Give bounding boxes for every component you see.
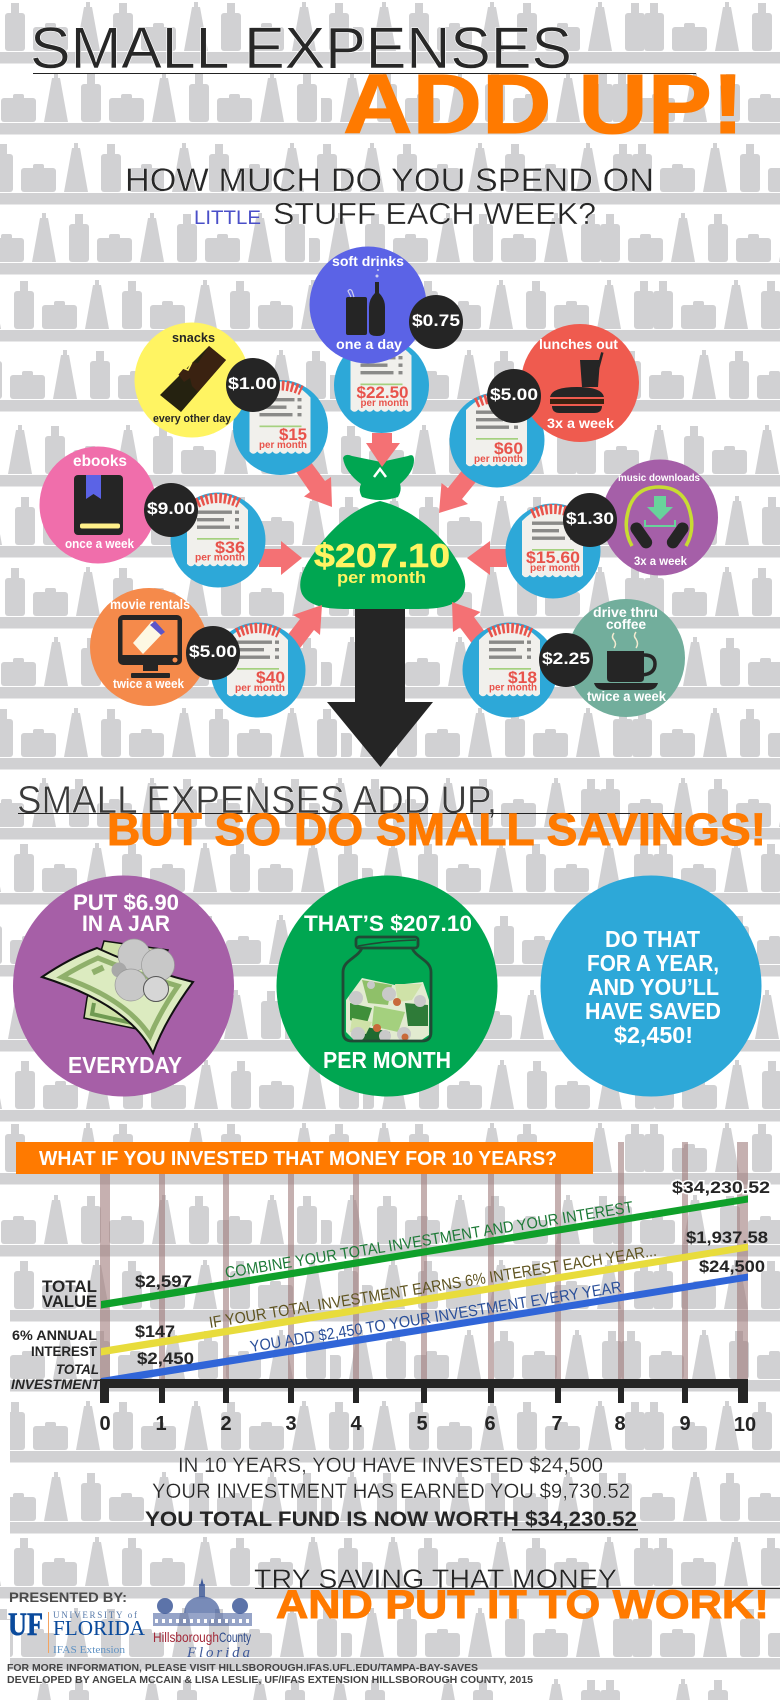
chart: end values: $34,230.52 [672,1179,770,1197]
chart: year labels: 10 [734,1414,756,1436]
receipt: soft drinks $22.50: $22.50 [356,383,408,402]
logo: University of Florida [8,1607,146,1656]
chart: left axis labels: INVESTMENT [11,1377,102,1392]
footer credits: FOR MORE INFORMATION, PLEASE VISIT HILLSBOROUGH.IFAS.UFL.EDU/TAMPA-BAY-SAVES [7,1662,478,1674]
subtitle question: HOW MUCH DO YOU SPEND ON [125,162,654,198]
panel: that's $207.10 per month [276,876,498,1096]
chart: start values [135,1273,194,1368]
chart: start values: $2,450 [137,1350,194,1368]
item: drive thru coffee: drive thru [593,604,658,620]
panel: do that for a year: AND YOU’LL [588,974,719,1000]
item: snacks [134,322,250,438]
summary text [145,1454,638,1531]
heading: small savings [17,779,766,855]
price: $9.00 [144,483,198,537]
closing heading [254,1564,780,1627]
title: small expenses add up: ADD UP! [343,57,744,151]
item: snacks: every other day [153,413,232,425]
big down arrow [327,609,433,767]
chart: start values: $147 [135,1323,175,1341]
item: snacks: snacks [172,330,215,345]
receipt: coffee $18: $18 [508,668,537,687]
panel: put $6.90 in a jar: IN A JAR [82,911,170,936]
summary text: IN 10 YEARS, YOU HAVE INVESTED $24,500 [178,1454,603,1477]
money bag total [300,455,465,609]
item: music downloads: 3x a week [634,554,687,568]
receipt: ebooks $36 [170,492,266,588]
chart: end values: $1,937.58 [686,1229,768,1247]
receipt: music $15.60: $15.60 [526,548,580,567]
receipt: ebooks $36: $36 [215,538,245,557]
receipt: soft drinks $22.50 [334,338,429,433]
chart: left axis labels: VALUE [42,1292,97,1311]
item: lunches out [521,324,639,442]
receipt: music $15.60: per month [530,563,580,574]
receipt: music $15.60 [506,504,600,598]
chart: year labels: 6 [484,1413,496,1435]
logo: Hillsborough County: Hillsborough [153,1629,219,1645]
subtitle question: LITTLE [194,208,261,229]
item: soft drinks: one a day [336,336,402,352]
receipt: coffee $18 [462,622,558,718]
chart: title banner: WHAT IF YOU INVESTED THAT MONEY FOR 10 YEARS? [39,1148,557,1170]
chart: year labels: 3 [285,1413,297,1435]
chart: end values [672,1179,770,1276]
chart: total value line [101,1196,748,1308]
summary text: YOUR INVESTMENT HAS EARNED YOU $9,730.52 [152,1480,630,1503]
price: $2.25 [539,633,593,687]
price: $0.75 [409,295,463,349]
price: $0.75: $0.75 [412,311,460,330]
item: movie rentals [90,588,208,706]
title: small expenses add up: SMALL EXPENSES [30,16,572,81]
chart: line captions: IF YOUR TOTAL INVESTMENT EARNS 6% INTEREST EACH YEAR... [208,1243,658,1332]
chart: year labels [99,1413,756,1436]
icon: bills and coins [42,939,193,1053]
panel: do that for a year: FOR A YEAR, [587,950,719,976]
item: lunches out: lunches out [539,336,618,352]
chart: left axis labels [11,1277,102,1392]
presented by: PRESENTED BY: [9,1589,127,1605]
panel: that's $207.10 per month: PER MONTH [323,1047,451,1073]
receipt: snacks $15: per month [259,440,307,451]
chart: year labels: 2 [220,1413,232,1435]
chart: investment line [101,1274,748,1386]
price: $9.00: $9.00 [147,499,195,518]
logo: University of Florida: FLORIDA [53,1616,146,1640]
item: ebooks [40,446,156,564]
price: $5.00 movies: $5.00 [189,642,237,661]
item: ebooks: ebooks [73,453,127,470]
chart: year labels: 9 [679,1413,691,1435]
chart: line captions: YOU ADD $2,450 TO YOUR INVESTMENT EVERY YEAR [249,1279,623,1356]
receipt: lunches $60: $60 [494,439,523,458]
closing heading: TRY SAVING THAT MONEY [254,1564,617,1594]
chart: year labels: 5 [416,1413,428,1435]
chart: year labels: 8 [614,1413,626,1435]
panel: put $6.90 in a jar: EVERYDAY [68,1052,182,1078]
subtitle question: STUFF EACH WEEK? [273,196,596,231]
closing heading: AND PUT IT TO WORK! [276,1583,769,1627]
item: drive thru coffee: coffee [606,616,646,632]
receipt: lunches $60: per month [474,454,523,465]
item: movie rentals: movie rentals [110,597,190,612]
item: movie rentals: twice a week [113,676,185,691]
chart: interest line [101,1244,748,1356]
salmon arrows into bag [259,433,507,665]
logo: Hillsborough County: County [219,1629,251,1645]
item: soft drinks: soft drinks [332,253,404,269]
panel: put $6.90 in a jar [13,876,234,1096]
chart: left axis labels: TOTAL [56,1362,99,1377]
item: music downloads: music downloads [618,472,700,484]
chart: line captions [208,1199,658,1356]
money bag total: per month [337,568,426,587]
chart: title banner [16,1142,593,1174]
receipt: movies $40: per month [235,683,285,694]
receipt: lunches $60 [450,392,544,488]
chart: year labels: 0 [99,1413,111,1435]
logo: Hillsborough County: Florida [186,1645,250,1661]
title: small expenses add up [30,16,744,151]
receipt: soft drinks $22.50: per month [360,398,408,409]
footer credits [7,1662,533,1686]
price: $1.00: $1.00 [228,374,277,393]
chart: x axis [100,1379,748,1403]
panel: do that for a year: HAVE SAVED [585,998,721,1024]
receipt: coffee $18: per month [489,682,537,694]
subtitle question [125,162,654,231]
receipt: snacks $15 [233,380,328,475]
panel: do that for a year [540,876,762,1096]
heading: small savings: SMALL EXPENSES ADD UP, [17,779,497,822]
chart: ten year investment [11,1142,770,1436]
logo: University of Florida: UF [8,1607,43,1643]
footer credits: DEVELOPED BY ANGELA MCCAIN & LISA LESLIE, UF/IFAS EXTENSION HILLSBOROUGH COUNTY, 2015 [7,1674,533,1686]
item: music downloads [602,460,718,576]
chart: line captions: COMBINE YOUR TOTAL INVESTMENT AND YOUR INTEREST [224,1199,635,1282]
icon: jar of money [343,937,431,1042]
chart: left axis labels: TOTAL [42,1277,97,1296]
panel: put $6.90 in a jar: PUT $6.90 [73,890,179,915]
logo: University of Florida: IFAS Extension [53,1644,126,1656]
receipt: movies $40: $40 [256,668,285,687]
panel: that's $207.10 per month: THAT’S $207.10 [304,911,472,936]
chart: left axis labels: 6% ANNUAL [12,1328,97,1343]
item: lunches out: 3x a week [547,415,614,431]
chart: year labels: 1 [155,1413,167,1435]
logo: Hillsborough County [153,1578,252,1661]
chart: year labels: 7 [551,1413,563,1435]
price: $5.00 lunches [487,369,541,423]
heading: small savings: BUT SO DO SMALL SAVINGS! [107,804,766,855]
item: drive thru coffee: twice a week [587,688,666,704]
logo: University of Florida: UNIVERSITY of [53,1610,137,1620]
chart: year labels: 4 [350,1413,362,1435]
panel: do that for a year: $2,450! [614,1022,693,1048]
chart: end values: $24,500 [699,1258,765,1276]
chart: vertical year bars [100,1142,748,1380]
summary text: YOU TOTAL FUND IS NOW WORTH $34,230.52 [145,1508,637,1531]
item: soft drinks [310,246,426,364]
money bag total: $207.10 [314,537,450,574]
price: $1.30: $1.30 [566,509,614,528]
price: $2.25: $2.25 [542,649,590,668]
receipt: ebooks $36: per month [195,552,245,564]
receipt: movies $40 [210,622,306,718]
price: $1.30 [563,493,617,547]
price: $5.00 movies [186,626,240,680]
panel: do that for a year: DO THAT [605,926,700,952]
price: $1.00 [226,358,280,412]
chart: start values: $2,597 [135,1273,192,1291]
price: $5.00 lunches: $5.00 [490,385,538,404]
chart: left axis labels: INTEREST [31,1344,98,1359]
receipt: snacks $15: $15 [279,425,307,444]
item: drive thru coffee [567,599,685,717]
item: ebooks: once a week [65,537,134,551]
